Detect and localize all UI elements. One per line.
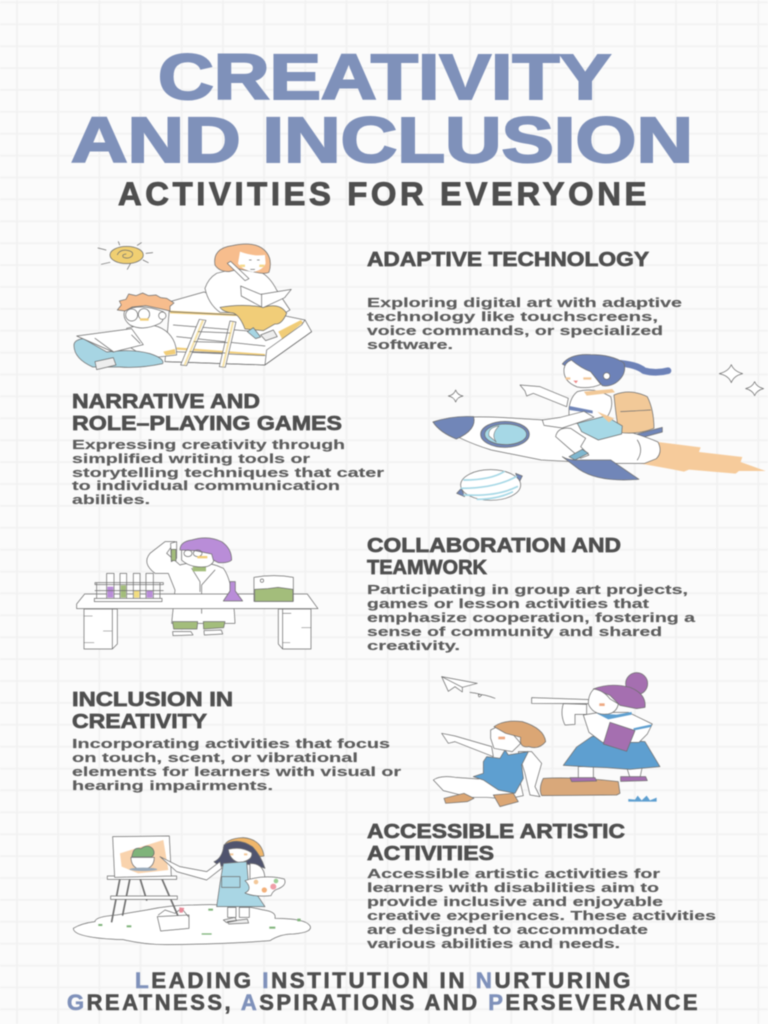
books stack (165, 292, 312, 365)
boy reading (74, 293, 177, 370)
text: collaboration: sense of community and shared (367, 624, 662, 639)
lab table (77, 594, 318, 649)
heading: narrative: NARRATIVE AND (72, 391, 260, 413)
text: inclusion: on touch, scent, or vibrational (72, 750, 358, 765)
tank (254, 576, 293, 601)
panel: adaptive technology (367, 249, 682, 352)
panel: collaboration and teamwork (367, 535, 696, 653)
title: CREATIVITY (158, 41, 611, 113)
panel: narrative and role-playing games (72, 391, 384, 507)
icon: planet (457, 470, 522, 500)
test tube rack (94, 573, 163, 602)
log (540, 778, 620, 796)
text: accessible: provide inclusive and enjoyable (367, 894, 663, 909)
illustration: girl riding a rocket (433, 355, 766, 500)
text: accessible: creative experiences. These activities (367, 908, 716, 923)
text: inclusion: hearing impairments. (72, 778, 273, 793)
text: narrative: abilities. (72, 492, 150, 507)
text: accessible: learners with disabilities aim to (367, 880, 659, 895)
illustration: scientist in the lab (77, 538, 318, 649)
footer tagline: LEADING INSTITUTION IN NURTURING (135, 968, 633, 993)
icon: sun (98, 242, 153, 269)
icon: paper airplane (442, 677, 495, 698)
text: adaptive technology: Exploring digital art with adaptive (367, 295, 682, 310)
text: narrative: storytelling techniques that cater (72, 465, 384, 480)
text: collaboration (367, 582, 696, 653)
heading: accessible (367, 821, 625, 865)
scientist (147, 538, 235, 636)
puddle ground (73, 905, 310, 945)
easel (107, 836, 178, 922)
footer tagline (67, 968, 700, 1015)
text: accessible (367, 866, 716, 951)
panel: inclusion in creativity (72, 689, 401, 793)
rocket girl (520, 355, 668, 460)
paint bucket (157, 907, 189, 931)
illustration: girl painting (73, 836, 310, 945)
heading: accessible: ACTIVITIES (367, 843, 494, 865)
illustration: children with telescope (433, 673, 660, 807)
heading: narrative (72, 391, 342, 435)
text: narrative: simplified writing tools or (72, 451, 310, 466)
girl with telescope (532, 673, 660, 782)
text: accessible: Accessible artistic activities for (367, 866, 660, 881)
flask (223, 582, 243, 601)
rocket (433, 416, 662, 480)
title: AND INCLUSION (71, 104, 693, 176)
text: inclusion: elements for learners with visual or (72, 764, 401, 779)
text: collaboration: Participating in group art projects, (367, 582, 688, 597)
text: collaboration: games or lesson activities that (367, 596, 650, 611)
icon: grass (628, 796, 657, 802)
girl reading (205, 244, 291, 341)
heading: adaptive technology: ADAPTIVE TECHNOLOGY (367, 249, 650, 271)
heading: narrative: ROLE–PLAYING GAMES (72, 413, 342, 435)
title (71, 41, 693, 176)
heading: collaboration (367, 535, 621, 579)
text: narrative (72, 437, 384, 507)
text: accessible: various abilities and needs. (367, 936, 620, 951)
text: collaboration: creativity. (367, 638, 460, 653)
grass tufts (98, 909, 301, 935)
heading: collaboration: COLLABORATION AND (367, 535, 621, 557)
text: inclusion: Incorporating activities that focus (72, 736, 390, 751)
footer tagline: GREATNESS, ASPIRATIONS AND PERSEVERANCE (67, 990, 700, 1015)
ladder (181, 319, 236, 367)
icon: flame (634, 440, 766, 474)
text: narrative: Expressing creativity through (72, 437, 345, 452)
text: accessible: are designed to accommodate (367, 922, 648, 937)
heading: inclusion (72, 689, 233, 733)
text: adaptive technology: software. (367, 337, 453, 352)
subtitle: ACTIVITIES FOR EVERYONE (118, 176, 650, 212)
text: inclusion (72, 736, 401, 793)
heading: inclusion: CREATIVITY (72, 711, 208, 733)
text: narrative: to individual communication (72, 478, 340, 493)
illustration: children reading on books (74, 242, 312, 370)
boy pointing (433, 721, 546, 807)
text: adaptive technology (367, 295, 682, 352)
heading: collaboration: TEAMWORK (367, 557, 488, 579)
text: adaptive technology: technology like touchscreens, (367, 309, 658, 324)
heading: inclusion: INCLUSION IN (72, 689, 233, 711)
heading: accessible: ACCESSIBLE ARTISTIC (367, 821, 625, 843)
panel: accessible artistic activities (367, 821, 716, 951)
painter girl (160, 838, 285, 924)
text: collaboration: emphasize cooperation, fostering a (367, 610, 696, 625)
icon: sparkles (448, 365, 764, 402)
text: adaptive technology: voice commands, or specialized (367, 323, 663, 338)
painting: potted plant (129, 846, 157, 871)
